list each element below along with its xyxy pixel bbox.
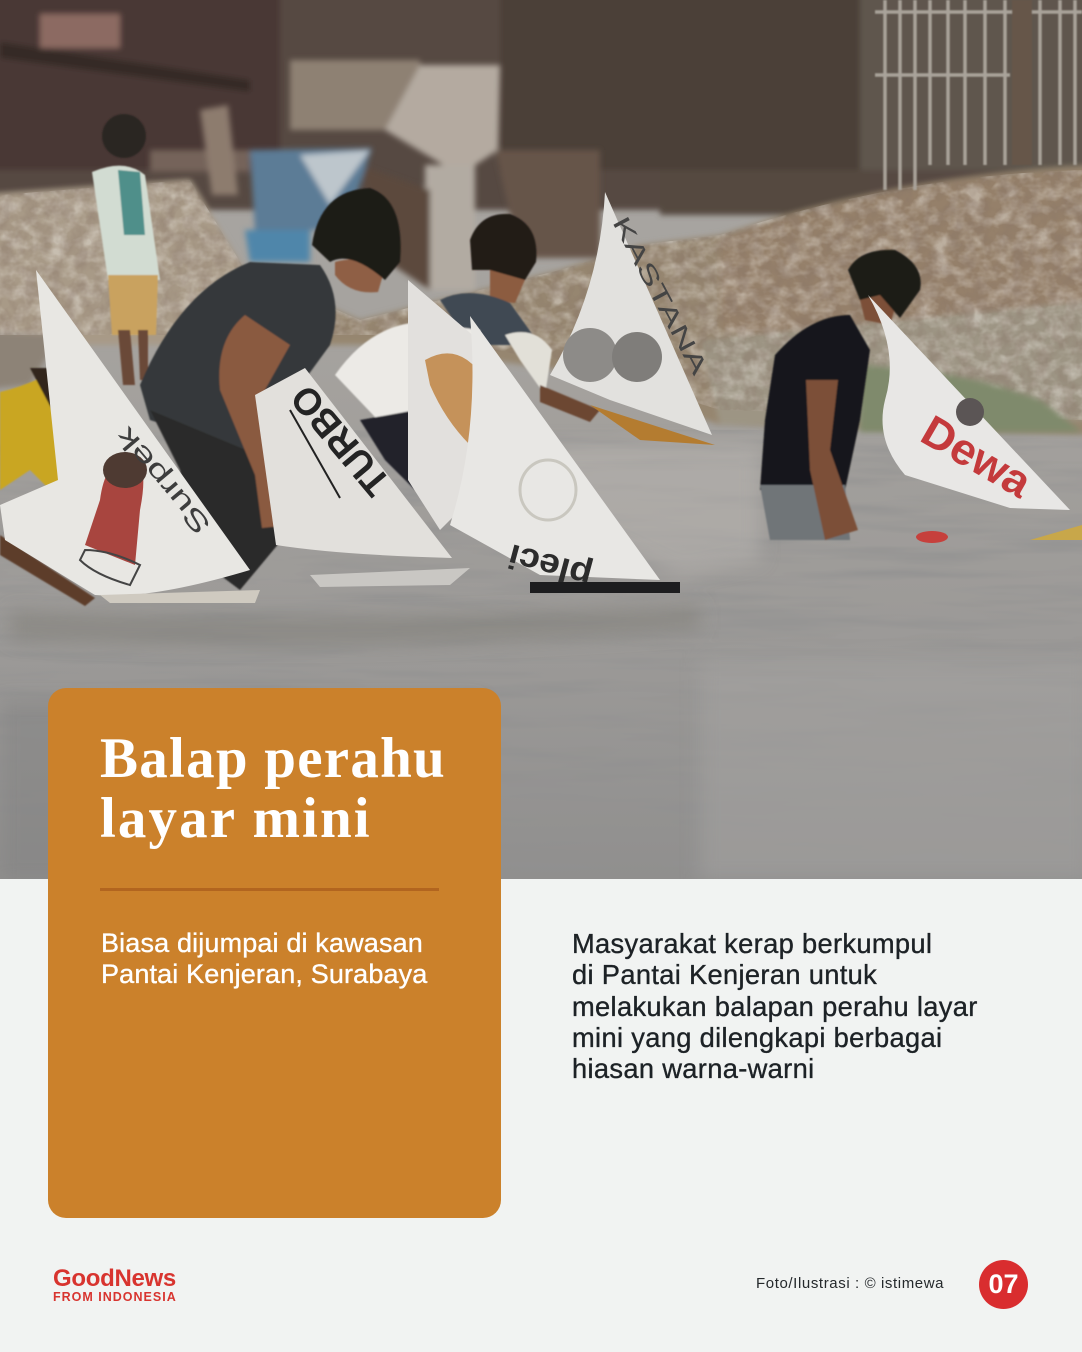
background child bbox=[102, 114, 146, 158]
subtitle: Biasa dijumpai di kawasan bbox=[101, 928, 423, 958]
subtitle bbox=[101, 928, 428, 989]
sail: folded centre bbox=[408, 280, 490, 530]
sail: Dewa: Dewa bbox=[913, 406, 1040, 508]
sail: Pleci: pleci bbox=[504, 536, 596, 595]
sail: Dewa bbox=[868, 295, 1082, 543]
page number badge bbox=[979, 1260, 1028, 1309]
description text: mini yang dilengkapi berbagai bbox=[572, 1022, 942, 1053]
subtitle: Pantai Kenjeran, Surabaya bbox=[101, 959, 427, 989]
left boy in yellow bbox=[0, 368, 60, 500]
sail: Kastana: KASTANA bbox=[607, 212, 713, 379]
bamboo fence bbox=[875, 0, 1082, 190]
boy 3 bbox=[860, 290, 900, 325]
sail: Kastana bbox=[550, 192, 715, 445]
sail: Turbo: TURBO bbox=[283, 377, 399, 503]
page number badge: 07 bbox=[988, 1269, 1019, 1299]
background: shacks and rubbish bank bbox=[0, 0, 1082, 435]
description text: di Pantai Kenjeran untuk bbox=[572, 959, 877, 990]
description text: Masyarakat kerap berkumpul bbox=[572, 928, 932, 959]
sail: Surpek: Surpek bbox=[110, 421, 217, 540]
water reflections bbox=[0, 445, 1082, 880]
orange title card bbox=[48, 688, 501, 1218]
logo: GoodNews from Indonesia: FROM INDONESIA bbox=[53, 1290, 177, 1304]
water ripples bbox=[0, 430, 1082, 879]
logo: GoodNews from Indonesia: GoodNews bbox=[53, 1265, 176, 1292]
shack structures bbox=[150, 60, 1082, 432]
description text: hiasan warna-warni bbox=[572, 1053, 814, 1084]
boy 2 bbox=[490, 268, 530, 303]
sail: Surpek bbox=[0, 270, 260, 603]
boy 1 bbox=[140, 262, 336, 460]
description text bbox=[572, 928, 978, 1084]
photo credit: Foto/Ilustrasi : © istimewa bbox=[756, 1275, 944, 1292]
sail: Turbo bbox=[255, 368, 470, 587]
title: Balap perahu bbox=[100, 727, 446, 790]
description text: melakukan balapan perahu layar bbox=[572, 991, 978, 1022]
photo: boys racing mini sailboats in shallow water bbox=[0, 0, 1082, 879]
rubbish texture bbox=[0, 165, 1082, 425]
title bbox=[100, 727, 446, 850]
sail: Pleci bbox=[450, 316, 680, 595]
logo: GoodNews from Indonesia bbox=[53, 1265, 177, 1304]
title: layar mini bbox=[100, 787, 372, 850]
